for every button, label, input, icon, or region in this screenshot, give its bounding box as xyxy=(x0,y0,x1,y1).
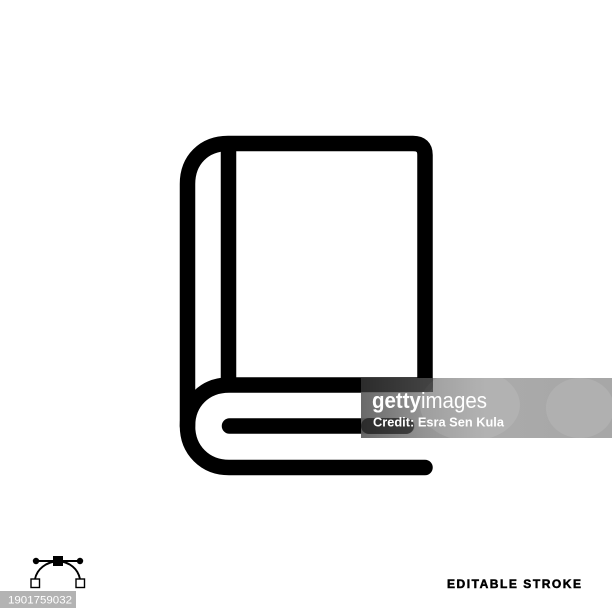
icon: bezier curve tool xyxy=(31,556,84,588)
bezier handle dots xyxy=(33,558,83,564)
watermark dark book overlay xyxy=(361,378,433,434)
strip background xyxy=(0,591,76,608)
icon: book xyxy=(188,144,425,468)
editable stroke label: EDITABLE STROKE xyxy=(447,577,581,591)
watermark banner xyxy=(361,369,612,441)
watermark blobs xyxy=(420,369,612,441)
book page line xyxy=(230,418,407,434)
book lower curve xyxy=(188,385,425,426)
book cover outline xyxy=(188,144,425,468)
stock number strip xyxy=(0,591,76,608)
bezier handle and curve xyxy=(35,561,80,579)
book spine xyxy=(221,144,236,385)
bezier anchor square xyxy=(53,556,63,566)
watermark background xyxy=(361,378,612,438)
watermark credit text: Credit: Esra Sen Kula xyxy=(373,414,505,430)
bezier end squares xyxy=(31,579,84,588)
watermark logo text: gettyimages xyxy=(372,388,487,413)
stock number: 1901759032 xyxy=(8,594,72,606)
